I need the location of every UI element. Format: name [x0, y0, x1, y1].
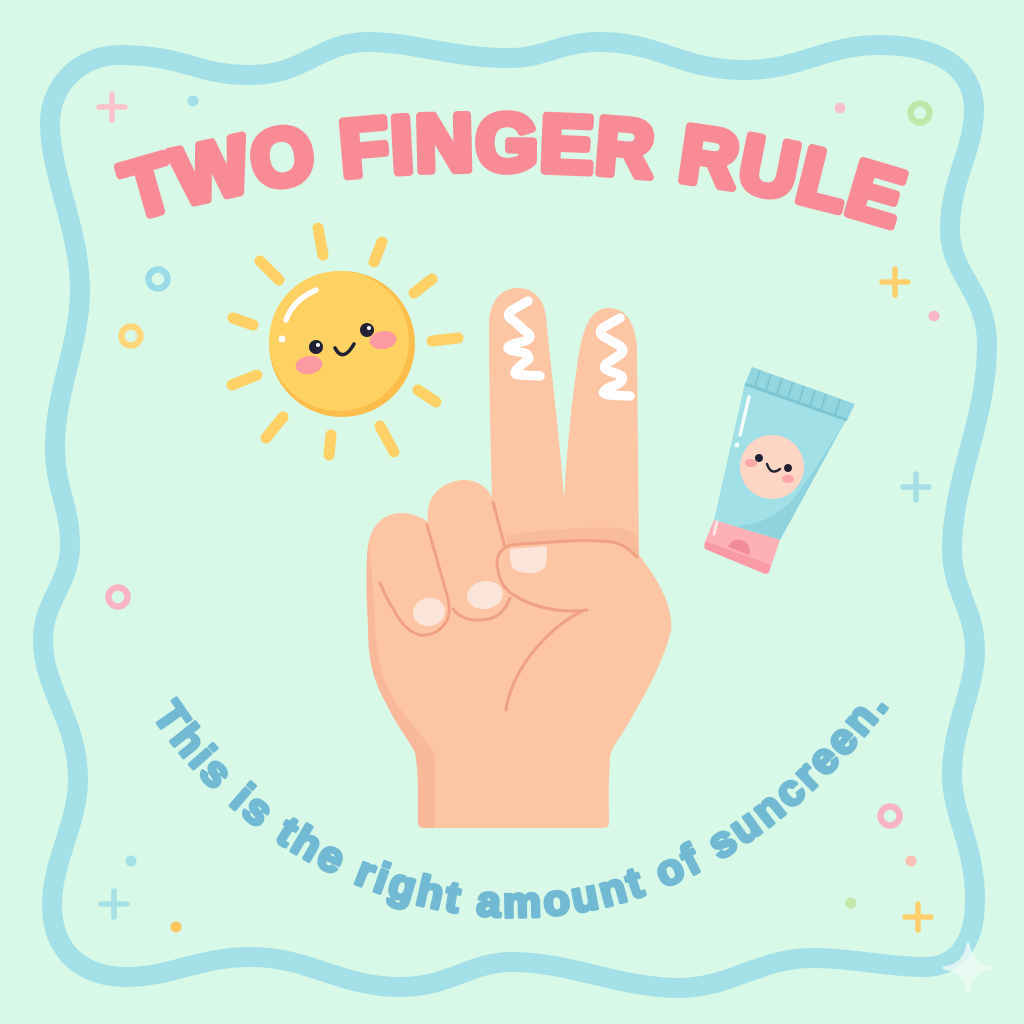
finger outlines — [380, 502, 637, 710]
palm crease — [506, 610, 585, 710]
sun face — [294, 323, 398, 376]
tube crimp — [745, 367, 855, 420]
decorative sparkles and dots — [99, 94, 992, 992]
sun rays — [232, 228, 458, 455]
subtitle: This is the right amount of suncreen. — [156, 696, 889, 919]
title: TWO FINGER RULE — [114, 110, 909, 230]
finger nails — [410, 546, 547, 629]
sunscreen tube icon — [704, 367, 855, 574]
tube body — [714, 383, 847, 540]
hand silhouette — [366, 288, 671, 828]
hand icon — [366, 288, 671, 828]
wrist shadow — [366, 545, 435, 828]
sun disc — [269, 271, 415, 417]
thumb line — [497, 541, 637, 611]
sun icon — [232, 228, 458, 455]
tube highlight — [740, 397, 749, 435]
middle finger side — [453, 502, 510, 620]
sunscreen strip: second finger — [600, 318, 630, 396]
tube cap — [704, 520, 780, 574]
thumb crease shadow — [507, 527, 639, 557]
tube face — [740, 435, 804, 499]
sunscreen strip: first finger — [508, 301, 540, 376]
ring finger side — [380, 525, 449, 635]
sun highlight — [286, 290, 316, 320]
